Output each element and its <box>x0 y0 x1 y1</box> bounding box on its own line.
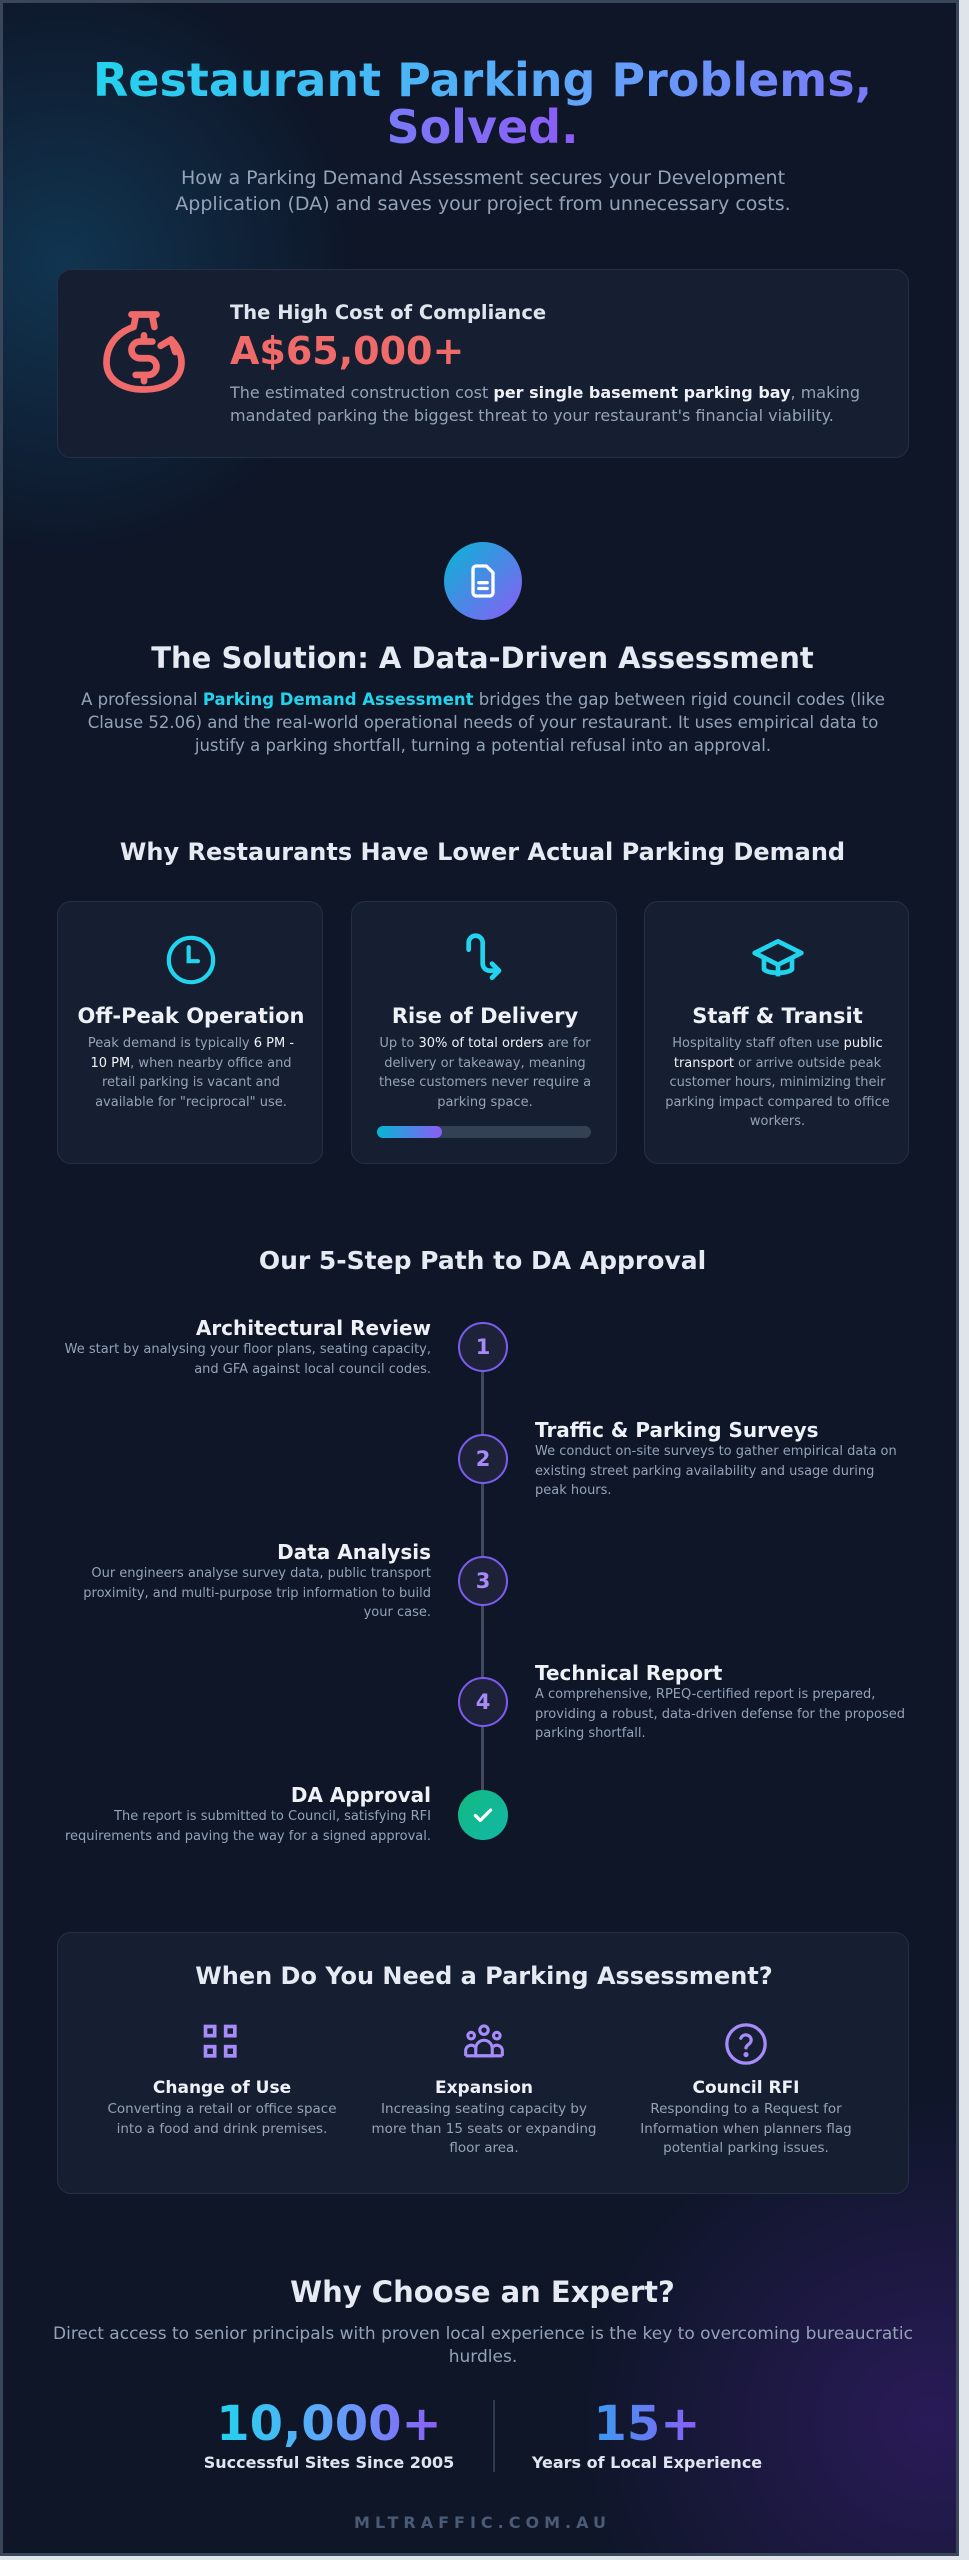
text: step 3: Our engineers analyse survey data, public transport proximity, and multi-purpose trip information to build your case. <box>83 1566 431 1620</box>
icon: cap <box>752 939 804 976</box>
text: solution description: A professional Parking Demand Assessment bridges the gap between rigid council codes (like Clause 52.06) and the real-world operational needs of your restaurant. It uses empirical data to justify a parking shortfall, turning a potential refusal into an approval. <box>81 690 885 755</box>
step 5 check <box>458 1790 508 1840</box>
title: Restaurant Parking Problems, <box>93 53 872 107</box>
text: step 5: The report is submitted to Council, satisfying RFI requirements and paving the way for a signed approval. <box>65 1809 431 1844</box>
heading: when: When Do You Need a Parking Assessment? <box>195 1962 773 1990</box>
title <box>93 53 872 154</box>
step 3 <box>458 1556 508 1606</box>
text: step 2: We conduct on-site surveys to gather empirical data on existing street parking availability and usage during peak hours. <box>535 1444 897 1498</box>
heading: lower demand: Why Restaurants Have Lower Actual Parking Demand <box>120 838 845 866</box>
text: step 1 <box>65 1316 431 1376</box>
text: staff: Staff & Transit <box>692 1004 863 1028</box>
text: step 2 <box>535 1418 897 1498</box>
stat: years: 15+ <box>593 2396 700 2452</box>
step 3: 3 <box>476 1569 490 1593</box>
subtitle: How a Parking Demand Assessment secures your Development Application (DA) and saves your project from unnecessary costs. <box>175 167 791 215</box>
panel: delivery <box>351 901 617 1164</box>
item: expansion: Expansion <box>435 2078 533 2098</box>
stat: sites: Successful Sites Since 2005 <box>204 2453 454 2472</box>
step 2: 2 <box>476 1447 490 1471</box>
timeline <box>65 1316 905 1844</box>
icon: clock <box>166 936 216 984</box>
step 4 <box>458 1677 508 1727</box>
text: delivery <box>379 1004 591 1110</box>
item: council rfi: Council RFI <box>692 2078 800 2098</box>
heading: 5-step: Our 5-Step Path to DA Approval <box>259 1246 706 1275</box>
text: step 4: Technical Report <box>535 1661 722 1685</box>
text: cost description: The estimated construction cost per single basement parking bay, making mandated parking the biggest threat to your restaurant's financial viability. <box>230 383 860 425</box>
step 4: 4 <box>476 1690 490 1714</box>
footer: MLTRAFFIC.COM.AU <box>354 2513 611 2532</box>
text: step 4: A comprehensive, RPEQ-certified report is prepared, providing a robust, data-driven defense for the proposed parking shortfall. <box>535 1687 905 1741</box>
text: step 1: Architectural Review <box>196 1316 431 1340</box>
text: cost figure: A$65,000+ <box>230 329 464 373</box>
text: off-peak <box>78 1004 304 1110</box>
icon: money bag <box>103 311 185 393</box>
item: change of use: Change of Use <box>153 2078 291 2098</box>
item: change of use <box>107 2024 337 2136</box>
text: step 5 <box>65 1783 431 1844</box>
stat: sites: 10,000+ <box>216 2396 442 2452</box>
icon: document <box>444 542 522 620</box>
title: Solved. <box>386 100 579 154</box>
heading: solution: The Solution: A Data-Driven Assessment <box>151 641 814 675</box>
text: cost heading: The High Cost of Compliance <box>230 301 546 324</box>
stat: sites <box>204 2396 454 2472</box>
text: step 3: Data Analysis <box>277 1540 431 1564</box>
panel: staff <box>644 901 909 1164</box>
item: change of use: Converting a retail or office space into a food and drink premises. <box>107 2101 337 2136</box>
text: delivery: Up to 30% of total orders are for delivery or takeaway, meaning these customers never require a parking space. <box>379 1036 591 1110</box>
text: off-peak: Peak demand is typically 6 PM - 10 PM, when nearby office and retail parking is vacant and available for "reciprocal" use. <box>88 1036 294 1110</box>
text: delivery: Rise of Delivery <box>392 1004 578 1028</box>
heading: expert: Why Choose an Expert? <box>290 2275 675 2309</box>
item: expansion: Increasing seating capacity by more than 15 seats or expanding floor area. <box>372 2101 596 2156</box>
step 2 <box>458 1434 508 1484</box>
text: step 2: Traffic & Parking Surveys <box>535 1418 819 1442</box>
icon: route <box>466 933 502 980</box>
text: step 3 <box>83 1540 431 1620</box>
text: step 1: We start by analysing your floor plans, seating capacity, and GFA against local council codes. <box>65 1342 431 1376</box>
text: staff: Hospitality staff often use public transport or arrive outside peak customer hours, minimizing their parking impact compared to office workers. <box>665 1036 890 1129</box>
item: expansion <box>372 2024 596 2156</box>
text: expert description: Direct access to senior principals with proven local experience is the key to overcoming bureaucratic hurdles. <box>53 2324 913 2367</box>
stat: years: Years of Local Experience <box>532 2453 762 2472</box>
item: council rfi <box>640 2023 852 2156</box>
step 1 <box>458 1322 508 1372</box>
text: off-peak: Off-Peak Operation <box>78 1004 304 1028</box>
panel: off-peak <box>57 901 323 1164</box>
step 1: 1 <box>476 1335 490 1359</box>
stat: years <box>532 2396 762 2472</box>
text: step 5: DA Approval <box>291 1783 431 1807</box>
panel: when needed <box>57 1932 909 2194</box>
bar: 30% <box>377 1126 591 1138</box>
panel: cost of compliance <box>57 269 909 458</box>
item: council rfi: Responding to a Request for Information when planners flag potential parking issues. <box>640 2101 852 2156</box>
text: step 4 <box>535 1661 905 1741</box>
